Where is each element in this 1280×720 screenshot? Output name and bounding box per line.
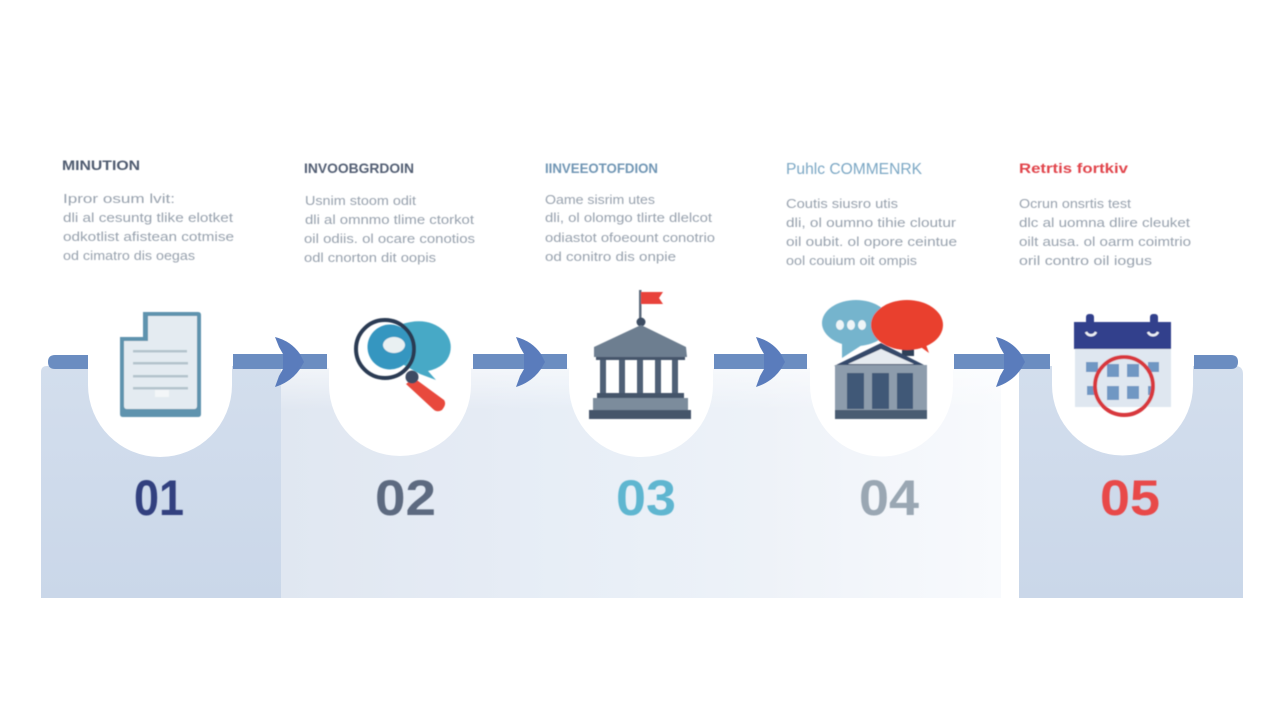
arrow: step 2 to 3: [516, 337, 545, 387]
body: step 4: oil oubit. ol opore ceintue: [786, 235, 957, 249]
panel: step 4 background: [760, 368, 1001, 598]
heading: step 1: MINUTION: [62, 157, 140, 173]
body: step 5: oilt ausa. ol oarm coimtrio: [1019, 235, 1191, 249]
body: step 2: [304, 194, 475, 265]
icon: speech bubbles over building: [822, 300, 943, 419]
number 01: 01: [134, 470, 184, 526]
body: step 4: [786, 197, 957, 268]
body: step 5: [1019, 197, 1191, 268]
body: step 1: dli al cesuntg tlike elotket: [63, 211, 234, 225]
body: step 5: Ocrun onsrtis test: [1019, 197, 1132, 211]
body: step 3: od conitro dis onpie: [545, 250, 676, 264]
body: step 3: Oame sisrim utes: [545, 193, 655, 207]
body: step 2: dli al omnmo tlime ctorkot: [305, 213, 475, 227]
step 2 text: [304, 160, 475, 265]
number 05: 05: [1100, 470, 1160, 526]
body: step 3: dli, ol olomgo tlirte dlelcot: [545, 211, 713, 225]
timeline bar: [48, 354, 1238, 369]
body: step 5: dlc al uomna dlire cleuket: [1019, 216, 1191, 230]
body: step 3: odiastot ofoeount conotrio: [545, 231, 715, 245]
icon: document: [120, 312, 201, 417]
step 1 text: [62, 157, 234, 263]
circle cutout: step 2: [329, 340, 471, 456]
icon: government building with flag: [589, 290, 691, 419]
body: step 3: [545, 193, 715, 264]
body: step 2: Usnim stoom odit: [305, 194, 417, 208]
body: step 4: Coutis siusro utis: [786, 197, 898, 211]
step 5 text: [1019, 160, 1191, 268]
step 3 text: [545, 160, 715, 264]
panel: step 3 background: [520, 368, 760, 598]
panel: step 1 background: [41, 366, 281, 598]
arrow: step 4 to 5: [996, 337, 1025, 387]
icon: calendar with red circle: [1074, 314, 1171, 415]
circle cutout: step 1: [88, 340, 232, 457]
number 02: 02: [375, 470, 436, 526]
body: step 2: oil odiis. ol ocare conotios: [304, 232, 475, 246]
circle cutout: step 4: [810, 340, 953, 456]
number 04: 04: [859, 470, 919, 526]
circle cutout: step 3: [569, 340, 713, 457]
heading: step 4: Puhlc COMMENRK: [786, 161, 923, 178]
arrow: step 1 to 2: [275, 337, 304, 387]
circle cutout: step 5: [1052, 340, 1193, 456]
body: step 4: dli, ol oumno tihie cloutur: [786, 216, 956, 230]
body: step 1: Ipror osum lvit:: [63, 192, 175, 206]
body: step 1: od cimatro dis oegas: [63, 249, 195, 263]
body: step 2: odl cnorton dit oopis: [304, 251, 436, 265]
arrow: step 3 to 4: [756, 337, 785, 387]
heading: step 2: INVOOBGRDOIN: [304, 160, 414, 176]
heading: step 3: IINVEEOTOFDION: [545, 160, 658, 176]
body: step 4: ool couium oit ompis: [786, 254, 917, 268]
body: step 1: odkotlist afistean cotmise: [63, 230, 234, 244]
heading: step 5: Retrtis fortkiv: [1019, 160, 1128, 176]
number 03: 03: [616, 470, 676, 526]
icon: magnifier and speech bubble: [356, 320, 451, 411]
step 4 text: [786, 161, 957, 268]
body: step 1: [63, 192, 234, 263]
body: step 5: oril contro oil iogus: [1019, 254, 1152, 268]
panel: step 2 background: [281, 368, 520, 598]
panel: step 5 background: [1019, 366, 1243, 598]
